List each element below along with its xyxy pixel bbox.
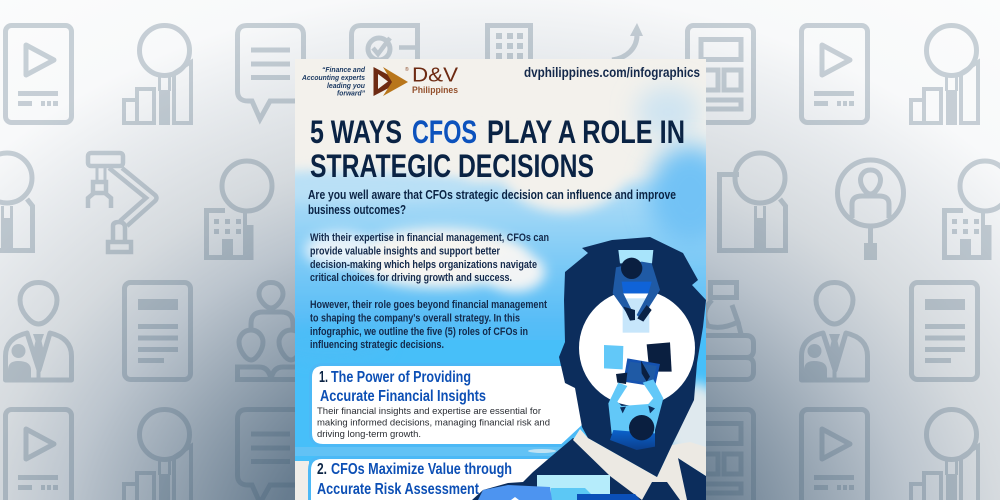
intro paragraph: critical choices for driving growth and success. xyxy=(310,272,512,284)
light blue note xyxy=(604,345,623,369)
header tagline xyxy=(301,67,366,98)
icon: checklist card xyxy=(352,26,418,62)
meeting figures xyxy=(604,250,672,450)
tablet xyxy=(616,358,660,387)
subheading xyxy=(308,190,676,214)
card 2: risk assessment: 2. xyxy=(317,461,327,478)
card 2: risk assessment: CFOs Maximize Value through xyxy=(331,461,512,478)
intro paragraph: provide valuable insights and support better xyxy=(310,246,501,258)
header tagline: leading you xyxy=(327,83,366,90)
website address: dvphilippines.com/infographics xyxy=(524,65,700,80)
second paragraph xyxy=(310,299,547,351)
D&V Philippines logo: D&V xyxy=(412,65,459,87)
D&V Philippines logo: Philippines xyxy=(412,85,458,95)
header tagline: Accounting experts xyxy=(301,75,365,82)
dark folder xyxy=(647,342,672,372)
icon: robot arm xyxy=(88,153,156,252)
icon: hand and stack xyxy=(700,282,754,380)
card 1: accurate financial insights: The Power of Providing xyxy=(331,369,471,386)
icon: magnifier building right xyxy=(944,161,1000,258)
title: PLAY A ROLE IN xyxy=(487,114,685,150)
suit xyxy=(472,438,706,500)
icon: business person right xyxy=(802,282,868,380)
poster panel xyxy=(295,59,706,500)
second paragraph: influencing strategic decisions. xyxy=(310,339,444,351)
top person xyxy=(613,250,660,322)
icon: magnifier chart bottom xyxy=(124,410,191,500)
icon: magnifier building xyxy=(206,161,272,258)
intro paragraph: With their expertise in financial management, CFOs can xyxy=(310,232,549,244)
title: STRATEGIC DECISIONS xyxy=(310,148,594,184)
icon: business person xyxy=(6,282,72,380)
icon: video card bottom right xyxy=(802,410,868,500)
icon: document xyxy=(124,282,190,380)
card 1: accurate financial insights: making informed decisions, managing financial risk and xyxy=(317,418,550,428)
icon: chat bubble bottom xyxy=(238,410,304,500)
second paragraph: infographic, we outline the five (5) roles of CFOs in xyxy=(310,326,528,338)
clipboard and folders xyxy=(478,475,640,500)
card 1: accurate financial insights: Accurate Financial Insights xyxy=(320,388,486,405)
icon: layout card bottom xyxy=(688,410,754,500)
card 2: risk assessment: Accurate Risk Assessment xyxy=(317,481,480,498)
header tagline: forward” xyxy=(337,90,365,98)
icon: magnifier chart bottom right xyxy=(911,410,978,500)
icon: group of people xyxy=(238,282,305,380)
card 1: accurate financial insights: driving long-term growth. xyxy=(317,429,421,440)
header tagline: “Finance and xyxy=(322,67,366,74)
icon: video card xyxy=(6,26,72,122)
illustration: executive silhouette with meeting scene xyxy=(472,237,706,500)
meeting table xyxy=(579,290,695,406)
document on table xyxy=(623,298,649,333)
title: CFOS xyxy=(412,114,477,150)
icon: video card right xyxy=(802,26,868,122)
icon: magnifier chart xyxy=(124,26,191,125)
intro paragraph: decision-making which helps organizations navigate xyxy=(310,259,537,271)
bottom person xyxy=(608,379,663,450)
subheading: business outcomes? xyxy=(308,202,406,217)
icon: document right xyxy=(912,282,978,380)
second paragraph: However, their role goes beyond financial management xyxy=(310,299,547,311)
card 1: accurate financial insights: 1. xyxy=(319,369,328,386)
icon: growth arrow xyxy=(612,23,643,60)
icon: chat bubble xyxy=(238,26,304,119)
D&V Philippines logo: ® xyxy=(405,66,409,73)
subheading: Are you well aware that CFOs strategic decision can influence and improve xyxy=(308,187,676,202)
D&V Philippines logo xyxy=(374,65,459,96)
icon: magnifier document right xyxy=(720,153,786,250)
icon: magnifier document left xyxy=(0,153,32,250)
card 1: accurate financial insights xyxy=(312,366,582,444)
head silhouette xyxy=(559,237,706,477)
second paragraph: to shaping the company's overall strategy. In this xyxy=(310,312,520,324)
intro paragraph xyxy=(310,232,549,284)
card 1: accurate financial insights: Their financial insights and expertise are essential for xyxy=(317,406,541,417)
icon: magnifier person xyxy=(838,160,904,260)
icon: magnifier chart right xyxy=(911,26,978,125)
icon: office block xyxy=(488,26,530,66)
shirt collar xyxy=(573,429,706,500)
title: 5 WAYS xyxy=(310,114,402,150)
sky wash xyxy=(295,79,706,477)
title xyxy=(310,120,684,178)
icon: video card bottom xyxy=(6,410,72,500)
icon: layout card xyxy=(688,26,754,122)
card 2: risk assessment xyxy=(308,459,548,500)
